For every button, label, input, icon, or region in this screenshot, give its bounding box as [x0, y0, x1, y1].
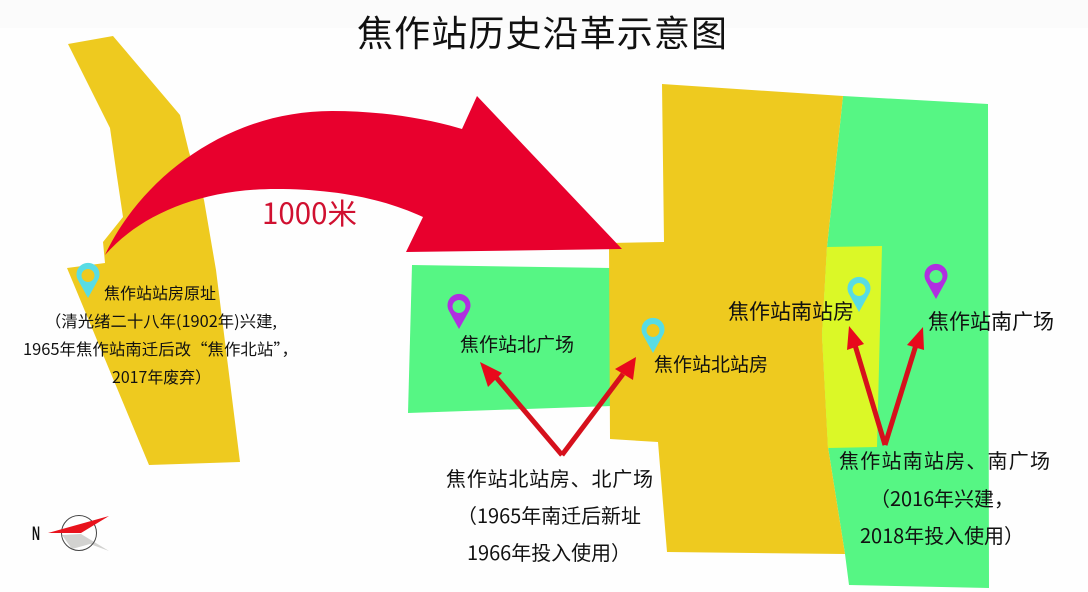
compass: [32, 516, 109, 551]
old station label: 焦作站站房原址: [104, 280, 216, 304]
pin: old station: [76, 263, 99, 298]
big red arrow: [105, 96, 622, 255]
south station label: 焦作站南站房: [728, 296, 854, 326]
pin: south square: [924, 264, 948, 299]
north annotation text: [446, 463, 653, 566]
old station label: 2017年废弃）: [112, 364, 211, 388]
south annotation text: 焦作站南站房、南广场: [839, 445, 1050, 474]
pin: north square: [448, 294, 470, 329]
north square label: 焦作站北广场: [460, 330, 574, 357]
old station label: （清光绪二十八年(1902年)兴建,: [45, 308, 277, 332]
old station site block: [67, 36, 240, 465]
pin: north station: [642, 318, 664, 353]
pin: south station: [847, 277, 870, 312]
north annotation text: 1966年投入使用）: [467, 537, 631, 566]
south annotation arrows: [847, 326, 924, 445]
south square green block: [822, 96, 989, 588]
current station yellow block: [609, 84, 845, 554]
distance label: 1000米: [262, 191, 357, 233]
south annotation text: 2018年投入使用）: [860, 520, 1024, 549]
north station label: 焦作站北站房: [654, 350, 768, 377]
south square label: 焦作站南广场: [928, 306, 1054, 336]
south station building block: [822, 246, 882, 448]
south annotation text: （2016年兴建，: [870, 483, 1014, 512]
north square green block: [408, 265, 612, 413]
north annotation text: 焦作站北站房、北广场: [446, 463, 653, 492]
south annotation text: [839, 445, 1050, 549]
title: 焦作站历史沿革示意图: [357, 5, 727, 57]
compass: N: [32, 524, 40, 545]
old station label: 1965年焦作站南迁后改“焦作北站”，: [23, 336, 298, 360]
north annotation arrows: [480, 357, 636, 455]
north annotation text: （1965年南迁后新址: [457, 500, 641, 529]
old station label: [23, 280, 298, 388]
